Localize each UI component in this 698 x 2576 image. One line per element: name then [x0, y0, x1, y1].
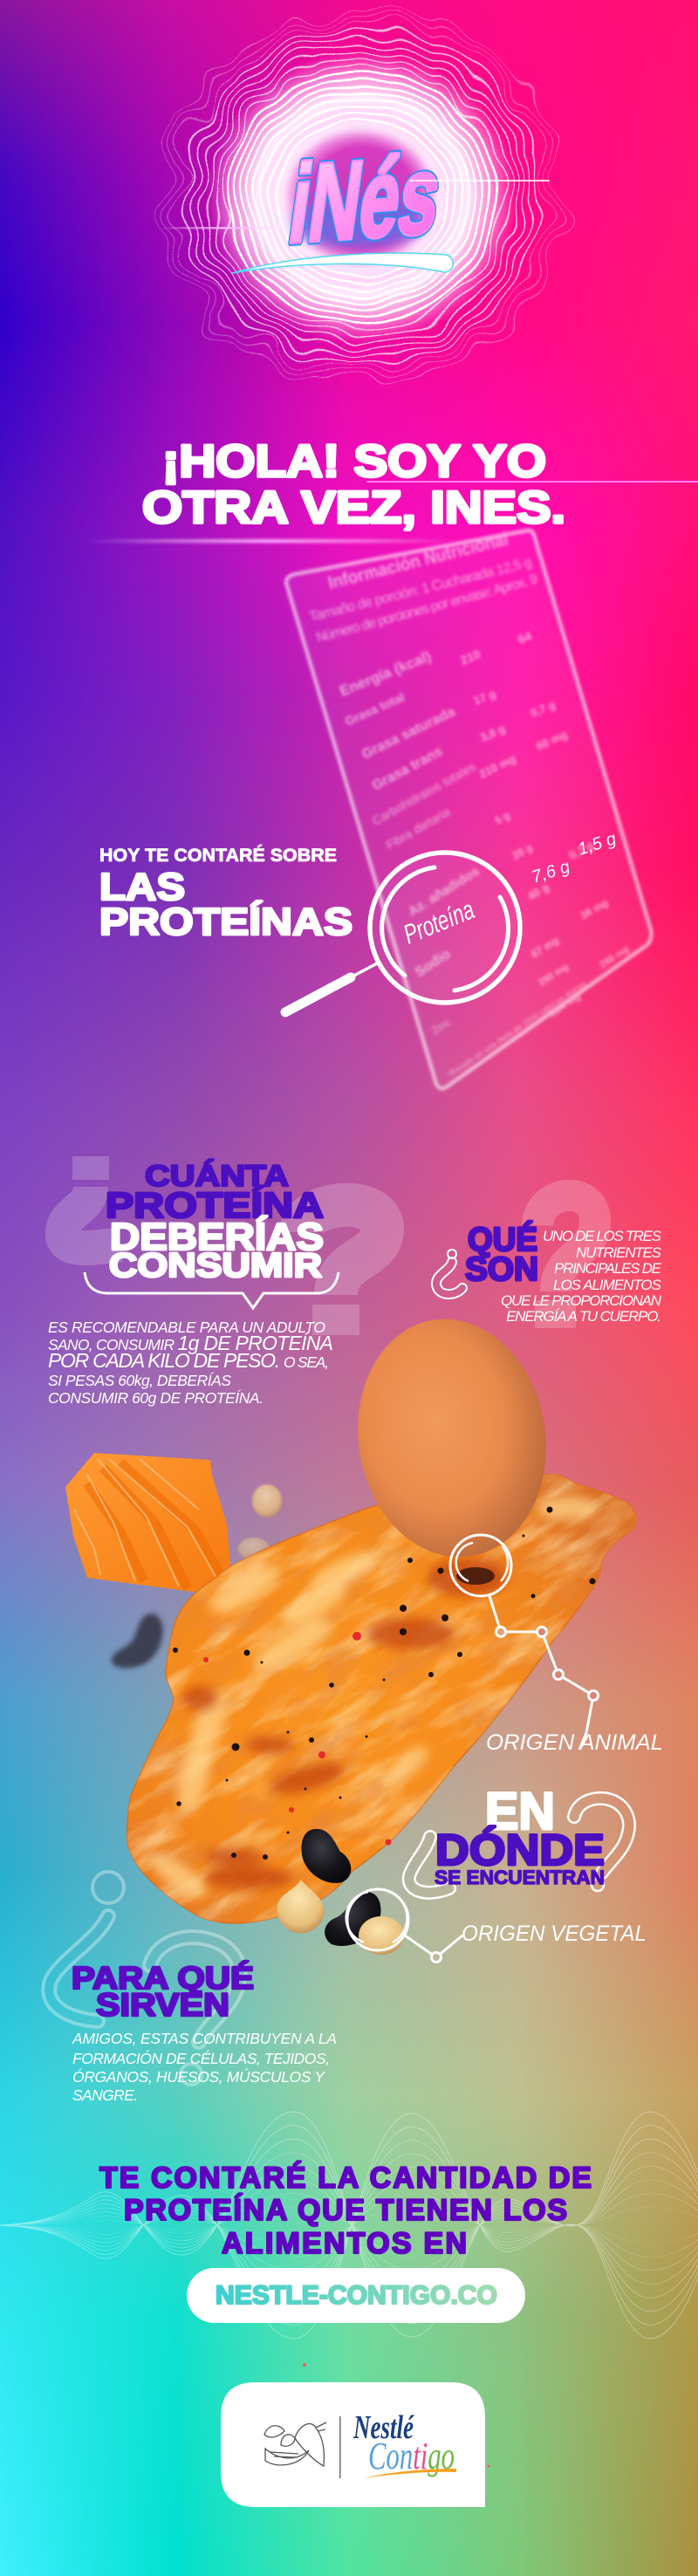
- nutrition label: 210: [458, 647, 482, 668]
- call to action: ALIMENTOS EN: [222, 2227, 467, 2260]
- heading: SON: [465, 1251, 538, 1288]
- nutrition label: Az. añadidos: [406, 864, 482, 919]
- nutrition label: Grasa trans: [370, 744, 445, 794]
- speech brace: [85, 1272, 339, 1308]
- label: ORIGEN VEGETAL: [462, 1922, 647, 1946]
- nutrition label: 40 g: [525, 880, 551, 903]
- url pill: NESTLE-CONTIGO.CO: [216, 2281, 497, 2310]
- nutrition label: 5 g: [493, 809, 512, 827]
- nutrition label: Tamaño de porción: 1 Cucharada 12,5 g: [308, 555, 533, 625]
- pale outline question marks: [35, 1872, 253, 2085]
- heading: CUÁNTA: [145, 1160, 289, 1193]
- paragraph: FORMACIÓN DE CÉLULAS, TEJIDOS,: [72, 2049, 330, 2067]
- paragraph: PRINCIPALES DE: [554, 1260, 662, 1277]
- chicken pepper specks: [173, 1506, 595, 1860]
- logo wordmark: iNés: [283, 132, 448, 266]
- nutrition label: Número de porciones por envase: Aprox. 9: [315, 572, 539, 646]
- heading: [72, 1960, 254, 2023]
- logo card: [221, 2382, 485, 2507]
- icon: magnifying glass: [285, 829, 619, 1012]
- nutrition label: Sodio: [413, 947, 454, 980]
- panel: en dónde: [401, 1791, 636, 1900]
- nutrition label: 0,84 mg: [547, 991, 583, 1020]
- nutrition label: Grasa total: [343, 689, 407, 729]
- nutrition label: Zinc: [429, 1016, 453, 1038]
- panel: para qué sirven: [35, 1872, 337, 2104]
- nutrition label: 17 g: [472, 687, 497, 708]
- paragraph: ENERGÍA A TU CUERPO.: [506, 1308, 661, 1325]
- nutrition label: 67 mg: [529, 934, 561, 961]
- paragraph: ÓRGANOS, HUESOS, MÚSCULOS Y: [72, 2067, 325, 2086]
- title: OTRA VEZ, INES.: [142, 483, 565, 533]
- call to action: PROTEÍNA QUE TIENEN LOS: [124, 2194, 567, 2227]
- nutrition label: 38 mg: [578, 896, 611, 922]
- magnified word: Proteína: [400, 894, 479, 949]
- Nestlé wordmark: Nestlé: [352, 2409, 414, 2446]
- chicken scorch marks: [183, 1559, 507, 1889]
- glow line lower: [87, 539, 454, 543]
- title: ¡HOLA! SOY YO: [162, 436, 546, 487]
- nutrition label: 3,8 g: [478, 722, 507, 744]
- label value 2: 1,5 g: [576, 829, 619, 860]
- call to action: [99, 2162, 592, 2260]
- nutrition label: 290 mg: [537, 962, 571, 989]
- heading: PROTEÍNA: [106, 1185, 324, 1225]
- food: legumes foreground: [277, 1829, 404, 1955]
- paragraph: LOS ALIMENTOS: [553, 1277, 662, 1293]
- paragraph: ES RECOMENDABLE PARA UN ADULTO: [48, 1319, 325, 1336]
- outline inverted question mark: [431, 1249, 468, 1300]
- icon: Nestlé nest: [264, 2422, 326, 2466]
- nutrition label: 20 g: [510, 841, 535, 862]
- logo swoosh: [232, 253, 453, 273]
- logo wordmark: iNés: [283, 132, 448, 266]
- heading: [465, 1220, 538, 1288]
- title: [87, 436, 698, 543]
- main heading: LAS: [99, 866, 185, 908]
- callout: origen vegetal: [346, 1889, 647, 1962]
- main heading: PROTEÍNAS: [99, 900, 352, 943]
- nutrition label: *Basado en una dieta de 2000 calorías diarias: [446, 979, 588, 1079]
- outline question marks: [401, 1791, 636, 1900]
- nutrition label: 0,7 g: [566, 838, 596, 862]
- paragraph: [501, 1228, 662, 1325]
- nutrition label: Fibra dietaria: [384, 805, 452, 853]
- paragraph: UNO DE LOS TRES: [543, 1228, 662, 1244]
- paragraph: SANGRE.: [72, 2086, 138, 2104]
- panel: en dónde: SE ENCUENTRAN: [435, 1867, 605, 1888]
- label value 1: 7,6 g: [530, 857, 572, 887]
- heading: EN: [485, 1782, 555, 1840]
- Contigo wordmark: Contigo: [368, 2435, 455, 2477]
- pale question marks: [63, 1156, 382, 1335]
- heading: QUÉ: [468, 1220, 537, 1258]
- url pill: [187, 2268, 525, 2323]
- nutrition label: Energía (kcal): [337, 647, 434, 700]
- floating legumes: [112, 1484, 282, 1668]
- food: egg: [341, 1305, 563, 1571]
- nutrition label: 64: [516, 628, 534, 647]
- nutrition label: 0,7 g: [529, 698, 558, 720]
- paragraph: AMIGOS, ESTAS CONTRIBUYEN A LA: [72, 2030, 337, 2047]
- stray specks: [303, 2363, 490, 2468]
- heading: SIRVEN: [96, 1987, 229, 2023]
- callout: origen animal: [450, 1535, 663, 1755]
- chicken highlights: [145, 1496, 599, 1905]
- nutrition label: Información Nutricional: [326, 529, 510, 593]
- panel: en dónde: DÓNDE: [435, 1826, 605, 1874]
- nutrition label: 210 mg: [477, 752, 518, 781]
- food: chicken breast: [126, 1473, 637, 1924]
- paragraph: QUE LE PROPORCIONAN: [501, 1292, 662, 1309]
- wave pattern: [0, 2112, 698, 2339]
- heading: CONSUMIR: [109, 1247, 322, 1285]
- nutrition label: Carbohidratos totales: [370, 759, 478, 828]
- paragraph: CONSUMIR 60g DE PROTEÍNA.: [48, 1389, 263, 1407]
- divider: [339, 2416, 341, 2478]
- panel: qué son: [419, 1196, 662, 1328]
- logo wordmark: [283, 132, 448, 266]
- glow line upper: [366, 481, 698, 483]
- swoosh: [364, 2469, 456, 2478]
- logo wordmark: iNés: [283, 132, 448, 266]
- heading: [106, 1160, 324, 1285]
- call to action: TE CONTARÉ LA CANTIDAD DE: [99, 2162, 592, 2195]
- nutrition label: 290 mg: [598, 944, 631, 971]
- paragraph: SANO, CONSUMIR 1g DE PROTEÍNA: [48, 1332, 333, 1354]
- paragraph: SI PESAS 60kg, DEBERÍAS: [48, 1372, 231, 1389]
- label: ORIGEN ANIMAL: [486, 1730, 663, 1755]
- paragraph: NUTRIENTES: [576, 1244, 662, 1261]
- chicken red peppercorns: [203, 1632, 391, 1845]
- nutrition label: Grasa saturada: [359, 704, 458, 763]
- small heading: HOY TE CONTARÉ SOBRE: [99, 846, 337, 866]
- panel: cuánta proteína: [48, 1156, 382, 1407]
- heading: PARA QUÉ: [72, 1960, 254, 1996]
- main heading: [99, 866, 352, 943]
- paragraph: [48, 1319, 333, 1407]
- nutrition label: 60 mg: [534, 728, 570, 753]
- logo: Inés neon rings: [161, 9, 559, 386]
- paragraph: POR CADA KILO DE PESO. O SEA,: [48, 1349, 329, 1372]
- food: salmon: [65, 1453, 232, 1595]
- heading: DEBERÍAS: [110, 1215, 324, 1258]
- intro block: [99, 846, 352, 943]
- nutrition label: [286, 529, 651, 1089]
- paragraph: [72, 2030, 337, 2104]
- pale question mark: [535, 1196, 595, 1328]
